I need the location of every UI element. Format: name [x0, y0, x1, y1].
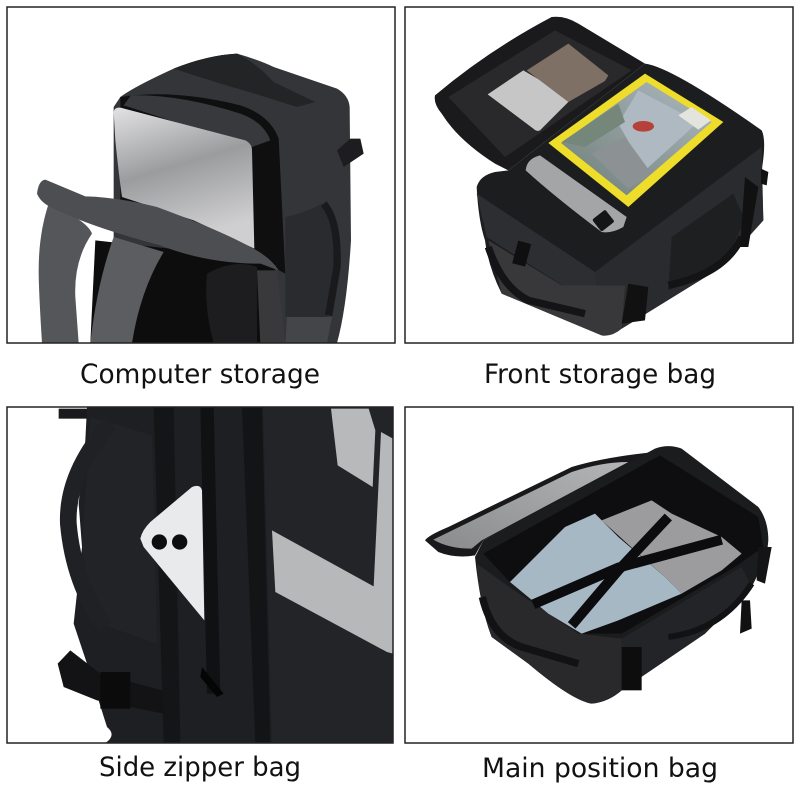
panel: side zipper bag photo — [58, 407, 393, 743]
icon: tablet — [526, 155, 627, 232]
notebook pages and cover — [488, 70, 572, 131]
zipper bands — [154, 407, 180, 743]
cross straps — [533, 540, 722, 604]
side handle — [60, 442, 86, 594]
icon: phone with cameras — [140, 486, 204, 620]
open lid — [425, 452, 655, 556]
panel border — [7, 407, 393, 743]
panel: main position bag photo — [425, 446, 772, 704]
panel border — [7, 7, 395, 343]
panel border — [405, 7, 793, 343]
handles and straps — [488, 247, 585, 314]
bag body — [475, 446, 768, 704]
right face — [595, 147, 763, 329]
icon: laptop — [114, 108, 254, 249]
side handle — [285, 204, 335, 317]
backpack body — [114, 54, 351, 343]
side pocket — [82, 417, 157, 644]
magazine — [548, 74, 723, 207]
zipper pull — [200, 667, 224, 697]
front face — [477, 194, 597, 287]
side buckle — [337, 139, 364, 167]
label: side zipper bag: Side zipper bag — [99, 752, 301, 783]
panel: computer storage photo — [37, 54, 364, 343]
label: front storage bag: Front storage bag — [484, 359, 716, 390]
interior — [483, 455, 763, 634]
bag body — [477, 64, 764, 336]
left shoulder strap — [39, 204, 92, 343]
bottom strap and buckle — [58, 650, 164, 714]
front flap — [37, 180, 279, 270]
label: computer storage: Computer storage — [80, 359, 320, 390]
black area behind straps — [90, 240, 285, 343]
panel: front storage bag photo — [435, 17, 768, 336]
blue clothes — [510, 514, 682, 634]
mesh panel — [206, 264, 257, 343]
lower flap corner — [257, 270, 285, 343]
handles and buckles — [482, 597, 578, 664]
panel border — [405, 407, 793, 743]
label: main position bag: Main position bag — [482, 753, 718, 784]
bag side — [74, 408, 272, 742]
grey clothes — [602, 500, 742, 594]
open lid — [435, 17, 645, 170]
front panel — [263, 407, 393, 743]
reflective chevrons — [331, 409, 375, 487]
bag front — [477, 564, 622, 704]
right shoulder strap — [90, 237, 164, 343]
